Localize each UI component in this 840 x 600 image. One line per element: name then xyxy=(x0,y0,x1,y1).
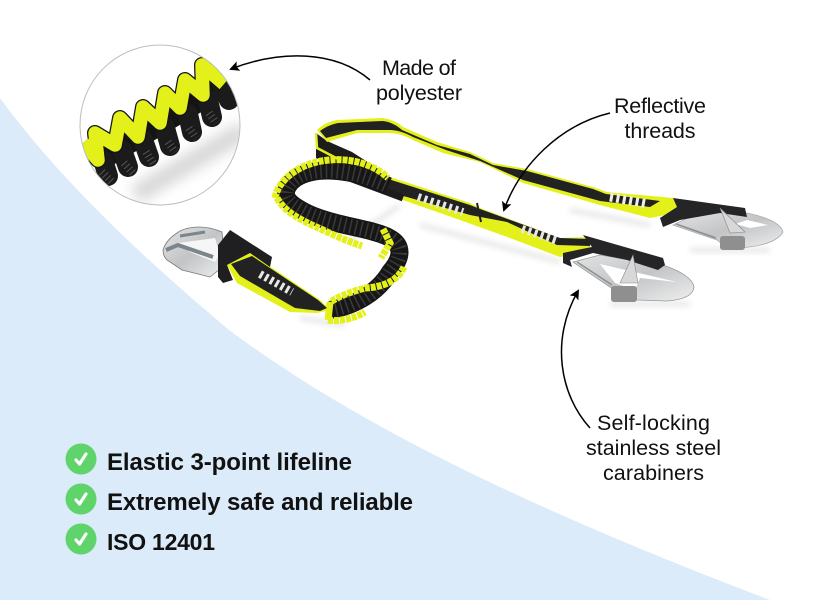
label: made of polyester: Made of xyxy=(382,56,456,80)
arrow: reflective threads xyxy=(504,113,610,210)
label: reflective threads xyxy=(614,94,706,143)
label: reflective threads: Reflective xyxy=(614,94,706,118)
feature 2: Extremely safe and reliable xyxy=(107,489,413,516)
lifeline product xyxy=(163,118,783,325)
shadow xyxy=(300,205,770,325)
lower strap xyxy=(340,176,590,257)
feature 3 xyxy=(66,524,215,555)
elastic section xyxy=(275,160,404,321)
arrow: made of polyester xyxy=(231,56,370,80)
feature 3: ISO 12401 xyxy=(107,529,215,555)
label: self-locking carabiners: carabiners xyxy=(603,461,704,485)
label: made of polyester: polyester xyxy=(376,81,462,105)
feature 1: Elastic 3-point lifeline xyxy=(107,449,352,476)
label: self-locking carabiners: stainless steel xyxy=(586,436,721,460)
left carabiner xyxy=(163,227,272,283)
right carabiner front xyxy=(563,235,694,302)
label: made of polyester xyxy=(376,56,462,105)
background: light blue curved area xyxy=(0,98,770,600)
label: self-locking carabiners: Self-locking xyxy=(597,411,710,435)
upper strap xyxy=(316,118,680,218)
feature list xyxy=(66,444,413,555)
left strap xyxy=(227,253,330,313)
arrow: carabiners xyxy=(561,291,590,428)
right carabiner rear xyxy=(660,198,783,250)
zoom circle: polyester detail xyxy=(80,45,245,205)
label: self-locking carabiners xyxy=(586,411,721,485)
label: reflective threads: threads xyxy=(624,119,696,143)
